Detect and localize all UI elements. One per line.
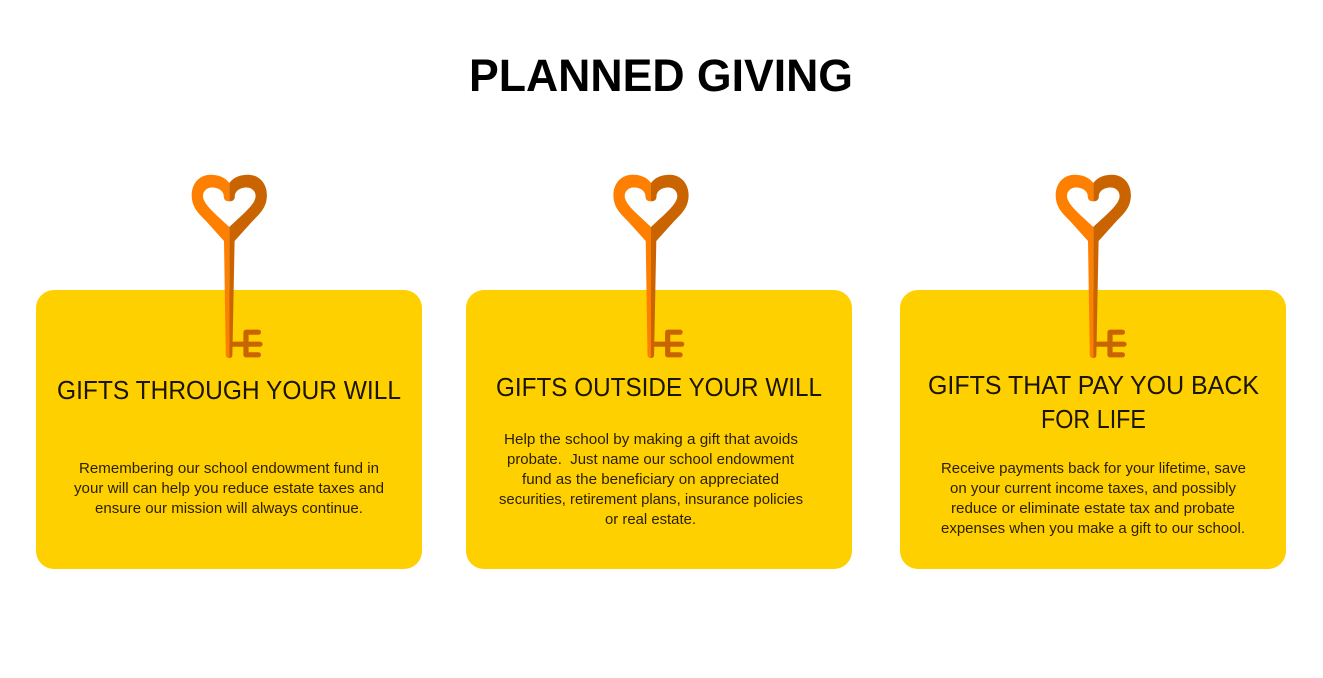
text block: outside will description: probate. Just name our school endowment xyxy=(507,452,794,468)
text block: pay back description: Receive payments back for your lifetime, save xyxy=(941,461,1246,477)
heading: gifts that pay you back for life: FOR LIFE xyxy=(1041,406,1146,434)
text block: will description: Remembering our school endowment fund in xyxy=(79,461,379,477)
text block: will description: your will can help you reduce estate taxes and xyxy=(74,481,384,497)
text block: outside will description xyxy=(499,432,803,528)
text block: pay back description: on your current income taxes, and possibly xyxy=(950,481,1237,497)
text block: outside will description: securities, retirement plans, insurance policies xyxy=(499,492,803,508)
icon: heart key 1 xyxy=(192,175,267,358)
panel: gifts outside your will xyxy=(466,290,852,569)
text block: outside will description: Help the school by making a gift that avoids xyxy=(504,432,798,448)
panel: gifts through your will xyxy=(36,290,422,569)
heading: gifts that pay you back for life: GIFTS THAT PAY YOU BACK xyxy=(928,372,1259,400)
icon: heart key 2 xyxy=(613,175,689,358)
text block: pay back description: expenses when you make a gift to our school. xyxy=(941,521,1245,537)
heading: gifts that pay you back for life xyxy=(928,372,1259,434)
panel: gifts that pay you back for life xyxy=(900,290,1286,569)
text block: will description xyxy=(74,461,384,517)
text block: outside will description: fund as the beneficiary on appreciated xyxy=(522,472,779,488)
title: PLANNED GIVING xyxy=(469,50,853,101)
text block: outside will description: or real estate. xyxy=(605,512,696,528)
text block: will description: ensure our mission will always continue. xyxy=(95,501,363,517)
heading: gifts through your will: GIFTS THROUGH YOUR WILL xyxy=(57,377,401,405)
icon: heart key 3 xyxy=(1056,175,1131,358)
text block: pay back description: reduce or eliminate estate tax and probate xyxy=(951,501,1235,517)
text block: pay back description xyxy=(941,461,1246,537)
heading: gifts outside your will: GIFTS OUTSIDE YOUR WILL xyxy=(496,374,822,402)
